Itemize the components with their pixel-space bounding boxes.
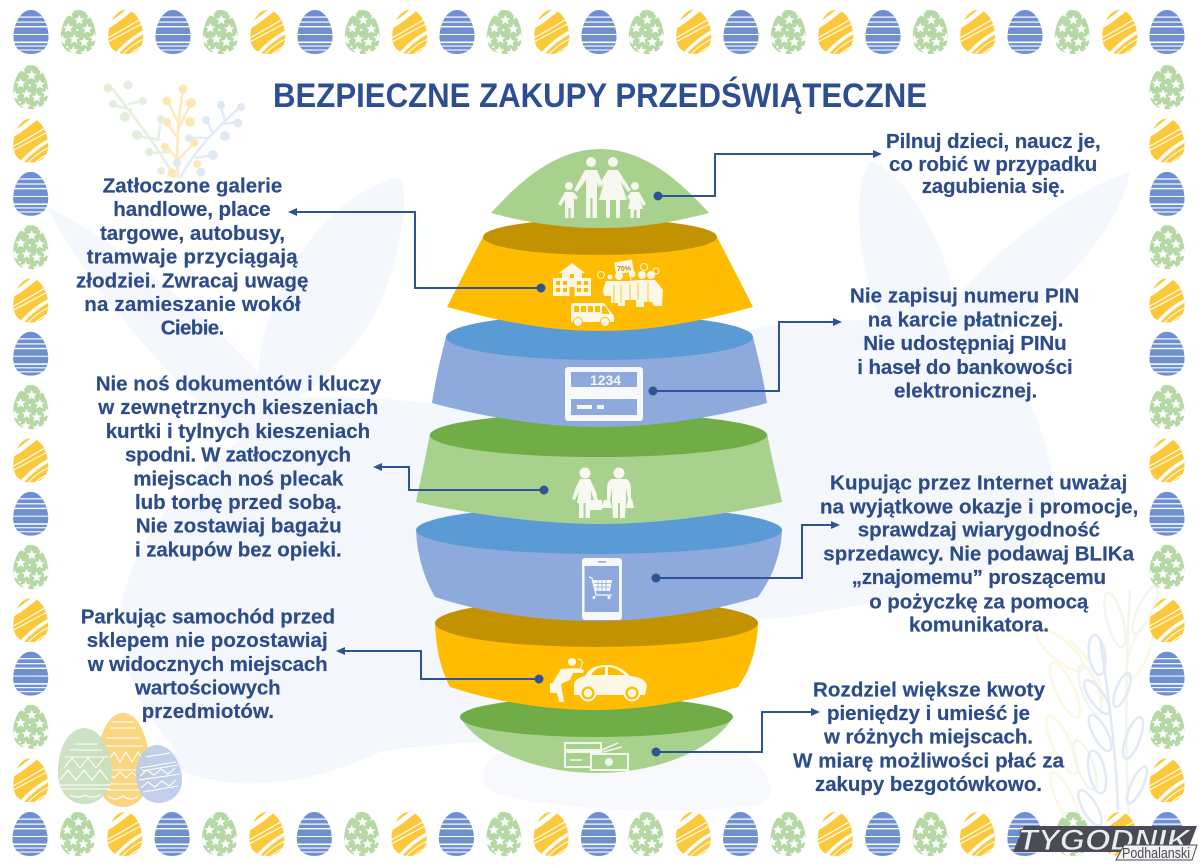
text block: crowded places: Ciebie. [161,317,224,340]
egg slice 6: yellow, car [435,599,758,710]
egg slice 4: green, shoppers [416,413,782,524]
egg slice 5: blue, phone [416,506,782,621]
text block: documents and keys: kurtki i tylnych kieszeniach [106,420,370,443]
text block: split money: w różnych miejscach. [823,726,1033,748]
egg slice 7: green bottom, cards [460,697,733,773]
text block: split money [793,679,1065,796]
text block: PIN safety: elektronicznej. [894,380,1037,403]
connector: car to text [336,647,544,684]
text block: documents and keys: miejscach noś plecak [133,467,344,490]
central egg [416,149,782,773]
text block: parked car: wartościowych [134,677,281,700]
text block: crowded places: złodziei. Zwracaj uwagę [76,269,308,292]
decoration: patterned eggs [58,713,182,807]
text block: watch children [886,130,1101,198]
icon: person at car [550,658,647,702]
logo: Tygodnik Podhalański: TYGODNIK [1018,824,1193,857]
connector: shoppers to text [373,463,548,494]
text block: crowded places: Zatłoczone galerie [103,174,282,198]
icon: bus [571,303,614,326]
text block: parked car: w widocznych miejscach [87,653,328,676]
text block: PIN safety: Nie udostępniaj PINu [863,332,1067,355]
connector: phone to text [652,521,840,582]
text block: parked car [81,606,335,723]
icon: PIN card: 1234 [590,372,621,388]
text block: PIN safety: na karcie płatniczej. [868,309,1063,332]
egg border: bottom row [11,809,1186,860]
connector: family to text [654,150,882,200]
text block: watch children: Pilnuj dzieci, naucz je, [886,130,1101,153]
right bunny silhouette [600,162,1130,630]
egg slice 2: yellow, crowds [447,219,753,331]
text block: internet shopping: sprzedawcy. Nie podawaj BLIKa [823,542,1135,565]
text block: PIN safety: i haseł do bankowości [857,356,1073,379]
text block: crowded places: handlowe, place [113,198,271,221]
text block: split money: pieniędzy i umieść je [827,702,1030,725]
connector: cards to text [652,708,820,756]
text block: PIN safety [850,285,1079,403]
text block: crowded places: targowe, autobusy, [100,222,285,245]
text block: crowded places: na zamieszanie wokół [84,293,301,316]
text block: internet shopping [820,471,1138,637]
text block: PIN safety: Nie zapisuj numeru PIN [850,285,1079,308]
lower middle background patch [482,746,770,810]
text block: internet shopping: o pożyczkę za pomocą [869,590,1089,613]
green patterned egg [58,728,112,804]
yellow patterned egg [96,713,150,807]
connector: crowds to text [288,208,546,292]
egg border: right column [1146,63,1188,806]
egg slice 1: green top, family [491,149,709,228]
icon: crowd with sale sign: 70% [617,266,632,273]
text block: watch children: zagubienia się. [922,175,1065,198]
icon: phone with cart [582,558,622,620]
icon: PIN card [565,367,643,421]
text block: split money: W miarę możliwości płać za [793,750,1065,772]
left bunny silhouette [47,178,640,783]
icon: crowd with sale sign [598,260,663,307]
text block: split money: zakupy bezgotówkowo. [815,773,1042,796]
text block: internet shopping: komunikatora. [909,614,1049,637]
text block: split money: Rozdziel większe kwoty [813,679,1046,702]
text block: parked car: Parkując samochód przed [81,606,335,628]
text block: internet shopping: „znajomemu” proszącemu [852,566,1106,589]
egg slice 3: blue, PIN card [432,314,767,427]
text block: documents and keys [96,372,382,561]
connector: PIN to text [648,318,842,396]
text block: documents and keys: i zakupów bez opieki. [135,538,342,561]
icon: family [558,157,646,218]
decoration: branch [104,80,245,178]
icon: cards and cash [565,743,628,770]
decoration: leaf sprig [1031,583,1162,840]
text block: crowded places [76,174,308,340]
text block: parked car: przedmiotów. [142,700,274,723]
text block: documents and keys: spodni. W zatłoczonych [125,444,351,467]
egg border: top row [12,7,1186,58]
text block: watch children: co robić w przypadku [889,153,1097,176]
text block: documents and keys: Nie noś dokumentów i kluczy [96,372,382,396]
text block: internet shopping: sprawdzaj wiarygodność [858,519,1100,542]
icon: couple with shopping bags [572,468,634,518]
text block: crowded places: tramwaje przyciągają [87,246,298,269]
text block: internet shopping: na wyjątkowe okazje i promocje, [820,495,1138,518]
text block: internet shopping: Kupując przez Internet uważaj [830,471,1127,494]
text block: parked car: sklepem nie pozostawiaj [87,629,328,652]
text block: documents and keys: lub torbę przed sobą. [135,491,342,514]
text block: documents and keys: Nie zostawiaj bagażu [136,515,342,538]
background bunnies [47,162,1130,810]
blue patterned egg [136,745,182,803]
title: BEZPIECZNE ZAKUPY PRZEDŚWIĄTECZNE [273,77,927,115]
icon: building [553,263,591,296]
egg border: left column [10,63,52,806]
text block: documents and keys: w zewnętrznych kieszeniach [97,396,378,419]
